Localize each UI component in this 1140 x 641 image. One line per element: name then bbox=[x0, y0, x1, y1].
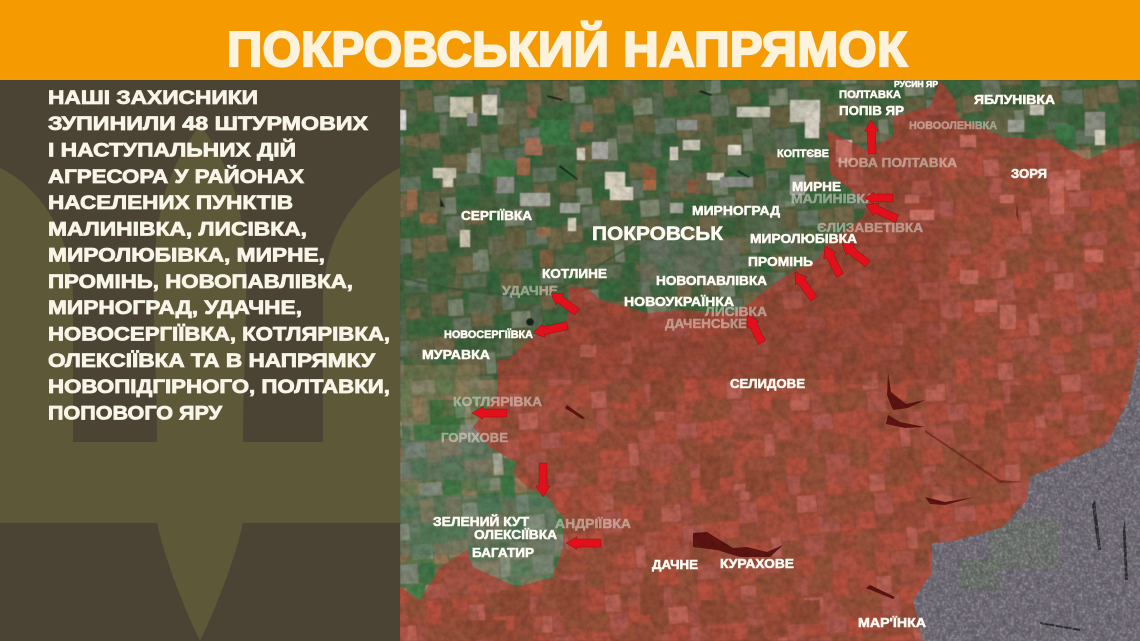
label: Нова Полтавка: НОВА ПОЛТАВКА bbox=[838, 155, 958, 170]
text block: summary: НАШІ ЗАХИСНИКИ bbox=[48, 88, 258, 109]
label: Горіхове: ГОРІХОВЕ bbox=[441, 430, 508, 445]
label: Сергіївка: СЕРГІЇВКА bbox=[461, 208, 533, 223]
header bar bbox=[0, 0, 1140, 80]
arrow: Новосергіївка bbox=[532, 319, 569, 340]
label: Дачне: ДАЧНЕ bbox=[652, 557, 698, 572]
label: Новоукраїнка: НОВОУКРАЇНКА bbox=[624, 294, 735, 309]
panel: left text panel bbox=[0, 80, 400, 641]
label: Миролюбівка: МИРОЛЮБІВКА bbox=[750, 231, 858, 246]
noise texture bbox=[400, 80, 1140, 641]
arrow: Лисівка bbox=[742, 312, 768, 346]
arrow: Миролюбівка east bbox=[838, 238, 872, 269]
label: Промінь: ПРОМІНЬ bbox=[748, 254, 813, 269]
label: Курахове: КУРАХОВЕ bbox=[720, 556, 794, 571]
label: Багатир: БАГАТИР bbox=[472, 545, 534, 560]
text block: summary: НАСЕЛЕНИХ ПУНКТІВ bbox=[48, 193, 293, 214]
arrow: Удачне bbox=[547, 287, 581, 317]
label: Новосергіївка: НОВОСЕРГІЇВКА bbox=[444, 328, 533, 341]
icon: trident emblem bbox=[0, 124, 400, 641]
label: Коптєве: КОПТЄВЕ bbox=[777, 148, 829, 160]
arrow: Малинівка bbox=[865, 192, 893, 204]
label: Лисівка: ЛИСІВКА bbox=[705, 304, 768, 319]
label: Малинівка: МАЛИНІВКА bbox=[791, 191, 876, 206]
label: Єлизаветівка: ЄЛИЗАВЕТІВКА bbox=[817, 220, 924, 235]
label: Муравка: МУРАВКА bbox=[422, 347, 491, 362]
label: Котлярівка: КОТЛЯРІВКА bbox=[453, 394, 543, 409]
label: Зелений Кут: ЗЕЛЕНИЙ КУТ bbox=[433, 514, 529, 529]
occupied zone bbox=[400, 80, 1140, 641]
label: Зоря: ЗОРЯ bbox=[1011, 166, 1047, 181]
reservoir and ravines in occupied zone bbox=[565, 202, 1025, 599]
label: Русин Яр: РУСИН ЯР bbox=[894, 80, 939, 89]
light fields under occupied zone bbox=[580, 135, 1103, 357]
label: Попів Яр: ПОПІВ ЯР bbox=[839, 103, 904, 118]
label: Удачне: УДАЧНЕ bbox=[502, 283, 558, 298]
title: ПОКРОВСЬКИЙ НАПРЯМОК bbox=[227, 22, 907, 77]
label: Олексіївка: ОЛЕКСІЇВКА bbox=[474, 527, 558, 542]
text block: summary bbox=[48, 88, 390, 424]
text block: summary: МАЛИНІВКА, ЛИСІВКА, bbox=[48, 220, 307, 240]
label: Селидове: СЕЛИДОВЕ bbox=[730, 376, 805, 391]
label: Даченське: ДАЧЕНСЬКЕ bbox=[665, 316, 747, 331]
arrow: Миролюбівка south bbox=[819, 243, 846, 279]
label: Новопавлівка: НОВОПАВЛІВКА bbox=[656, 273, 768, 288]
unoccupied grey urban area bbox=[900, 320, 1140, 641]
text block: summary: ОЛЕКСІЇВКА ТА В НАПРЯМКУ bbox=[48, 351, 375, 372]
map labels bbox=[422, 80, 1056, 630]
label: Котлине: КОТЛИНЕ bbox=[542, 266, 607, 281]
text block: summary: АГРЕСОРА У РАЙОНАХ bbox=[48, 166, 304, 188]
arrow: Олексіївка bbox=[566, 536, 601, 550]
label: Новооленівка: НОВООЛЕНІВКА bbox=[909, 120, 997, 132]
text block: summary: НОВОПІДГІРНОГО, ПОЛТАВКИ, bbox=[48, 377, 390, 398]
text block: summary: МИРНОГРАД, УДАЧНЕ, bbox=[48, 298, 302, 319]
arrow: Попів Яр bbox=[864, 120, 879, 154]
text block: summary: І НАСТУПАЛЬНИХ ДІЙ bbox=[48, 140, 296, 162]
arrow: Єлизаветівка bbox=[863, 199, 900, 225]
text block: summary: НОВОСЕРГІЇВКА, КОТЛЯРІВКА, bbox=[48, 324, 390, 346]
arrow: south-pointing bbox=[536, 463, 550, 497]
arrow: Котлярівка bbox=[472, 406, 507, 420]
text block: summary: ЗУПИНИЛИ 48 ШТУРМОВИХ bbox=[48, 114, 368, 135]
label: Мирноград: МИРНОГРАД bbox=[692, 203, 781, 218]
arrows: red attack directions bbox=[472, 120, 900, 550]
text block: summary: ПРОМІНЬ, НОВОПАВЛІВКА, bbox=[48, 272, 353, 293]
label: Мар'їнка: МАР'ЇНКА bbox=[858, 615, 927, 630]
map: satellite base with occupied zone bbox=[400, 80, 1140, 641]
water and ravines bbox=[440, 90, 750, 207]
label: Полтавка: ПОЛТАВКА bbox=[839, 89, 901, 101]
text block: summary: ПОПОВОГО ЯРУ bbox=[48, 404, 222, 424]
arrow: Промінь bbox=[789, 268, 820, 303]
label: Андріївка: АНДРІЇВКА bbox=[555, 516, 632, 531]
label: Мирне: МИРНЕ bbox=[792, 179, 841, 194]
label: Покровськ: ПОКРОВСЬК bbox=[592, 224, 723, 245]
text block: summary: МИРОЛЮБІВКА, МИРНЕ, bbox=[48, 246, 325, 266]
label: Яблунівка: ЯБЛУНІВКА bbox=[974, 92, 1056, 107]
